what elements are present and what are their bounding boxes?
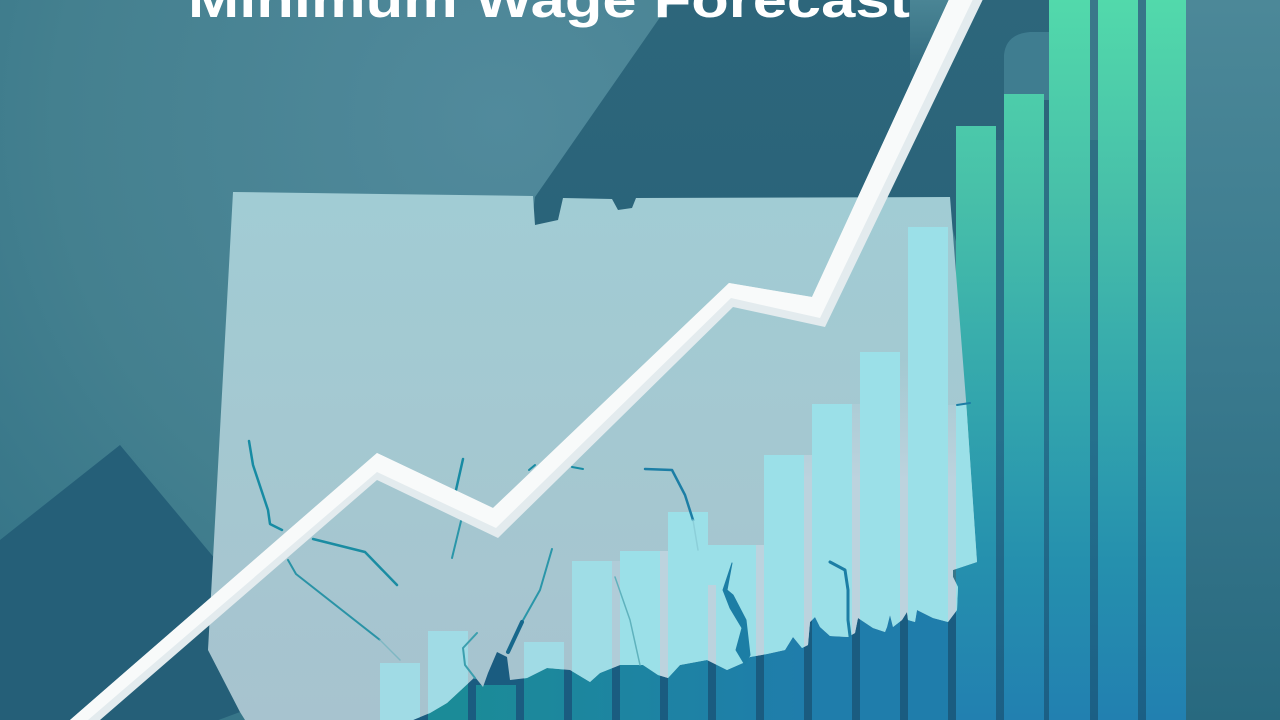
light bars seen through the map (380, 227, 996, 720)
rivers (249, 403, 970, 678)
trend line arrow (70, 0, 985, 720)
state map of Connecticut (200, 185, 996, 720)
bar gaps (400, 600, 1000, 720)
rounded light panel behind bar (1004, 32, 1049, 100)
bar gaps seen through the map (612, 401, 956, 678)
dark mountain silhouette, lower left (0, 445, 240, 720)
dark mountain silhouette, upper (530, 0, 1050, 400)
bar chart: coloured bars (400, 0, 1186, 720)
lighter panel behind the line (910, 0, 975, 85)
